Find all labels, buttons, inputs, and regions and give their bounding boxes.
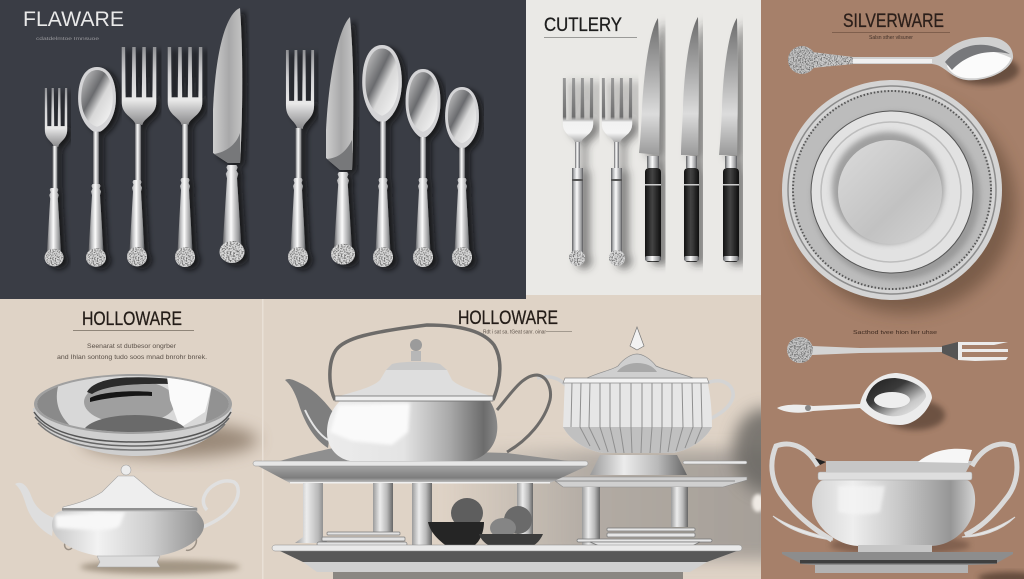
- dinner fork 2: [168, 47, 202, 267]
- tiered stand columns: [295, 483, 688, 547]
- dinner fork 1: [122, 47, 156, 266]
- silverware subtitle: Salsn sther vilsuner: [869, 35, 913, 41]
- panel: dark strip under flatware: [0, 295, 526, 299]
- chef knife 1: [639, 18, 661, 262]
- ornate fork: [787, 337, 1008, 363]
- holloware left description: [57, 344, 207, 361]
- cutlery underline: [544, 37, 637, 38]
- panel: flatware background: [0, 0, 526, 299]
- dessert fork: [286, 50, 314, 267]
- chef knife 3: [719, 18, 739, 262]
- heading: HOLLOWARE center: HOLLOWARE: [458, 308, 558, 329]
- dark bowls: [428, 498, 543, 547]
- heading: FLAWARE: FLAWARE: [23, 8, 124, 31]
- serving spoon: [788, 37, 1019, 85]
- panel: cutlery background: [526, 0, 761, 295]
- dinner knife: [326, 17, 355, 265]
- carving fork 2: [602, 78, 632, 266]
- left tier tray: [253, 448, 588, 484]
- tureen: [537, 327, 733, 475]
- table knife: [213, 8, 244, 263]
- soup spoon: [406, 69, 440, 267]
- tablespoon: [362, 45, 402, 267]
- holloware center rule: [546, 331, 572, 332]
- porcelain teapot: [15, 465, 240, 574]
- panel: silverware group: [772, 11, 1024, 579]
- silverware underline: [832, 32, 950, 33]
- stacked bowls: [33, 370, 258, 458]
- silverware caption: Sacthod tvee hion lier uhse: [853, 330, 937, 336]
- heading: CUTLERY: CUTLERY: [544, 15, 622, 36]
- panel divider: [262, 299, 264, 579]
- holloware left description: Seenarat st dutbesor ongrber: [87, 344, 176, 350]
- carving fork 1: [563, 78, 593, 266]
- holloware left underline: [73, 330, 194, 331]
- holloware center subtitle: Rdt i sat sa. tGeat sanr. oinar: [483, 330, 546, 336]
- panel: cutlery group: [544, 15, 739, 266]
- dinner plate: [782, 80, 1015, 313]
- base tray: [272, 545, 742, 579]
- flatware subtitle: cdatdelmtoe Imnsuoe: [36, 36, 100, 41]
- stacked plates right: [577, 528, 712, 547]
- panel: holloware center group: [253, 308, 797, 579]
- spoon: [78, 67, 116, 267]
- panel: silverware background: [761, 0, 1024, 579]
- small salad fork: [44, 88, 67, 266]
- sauce boat: [772, 444, 1024, 579]
- wall shadows: [440, 408, 797, 560]
- heading: SILVERWARE: SILVERWARE: [843, 11, 944, 32]
- right tier tray: [550, 461, 747, 487]
- kettle: [285, 325, 550, 461]
- chef knife 2: [681, 17, 699, 262]
- heading: HOLLOWARE left: HOLLOWARE: [82, 309, 182, 330]
- panel: flatware group: [23, 8, 479, 267]
- teaspoon: [445, 87, 479, 267]
- small ladle spoon: [777, 373, 945, 430]
- panel: holloware left group: [15, 309, 258, 574]
- holloware left description: and Ihlan sontong tudo soos mnad bnrohr bnrek.: [57, 355, 207, 361]
- stacked plates left: [317, 532, 407, 546]
- panel: holloware background: [0, 295, 761, 579]
